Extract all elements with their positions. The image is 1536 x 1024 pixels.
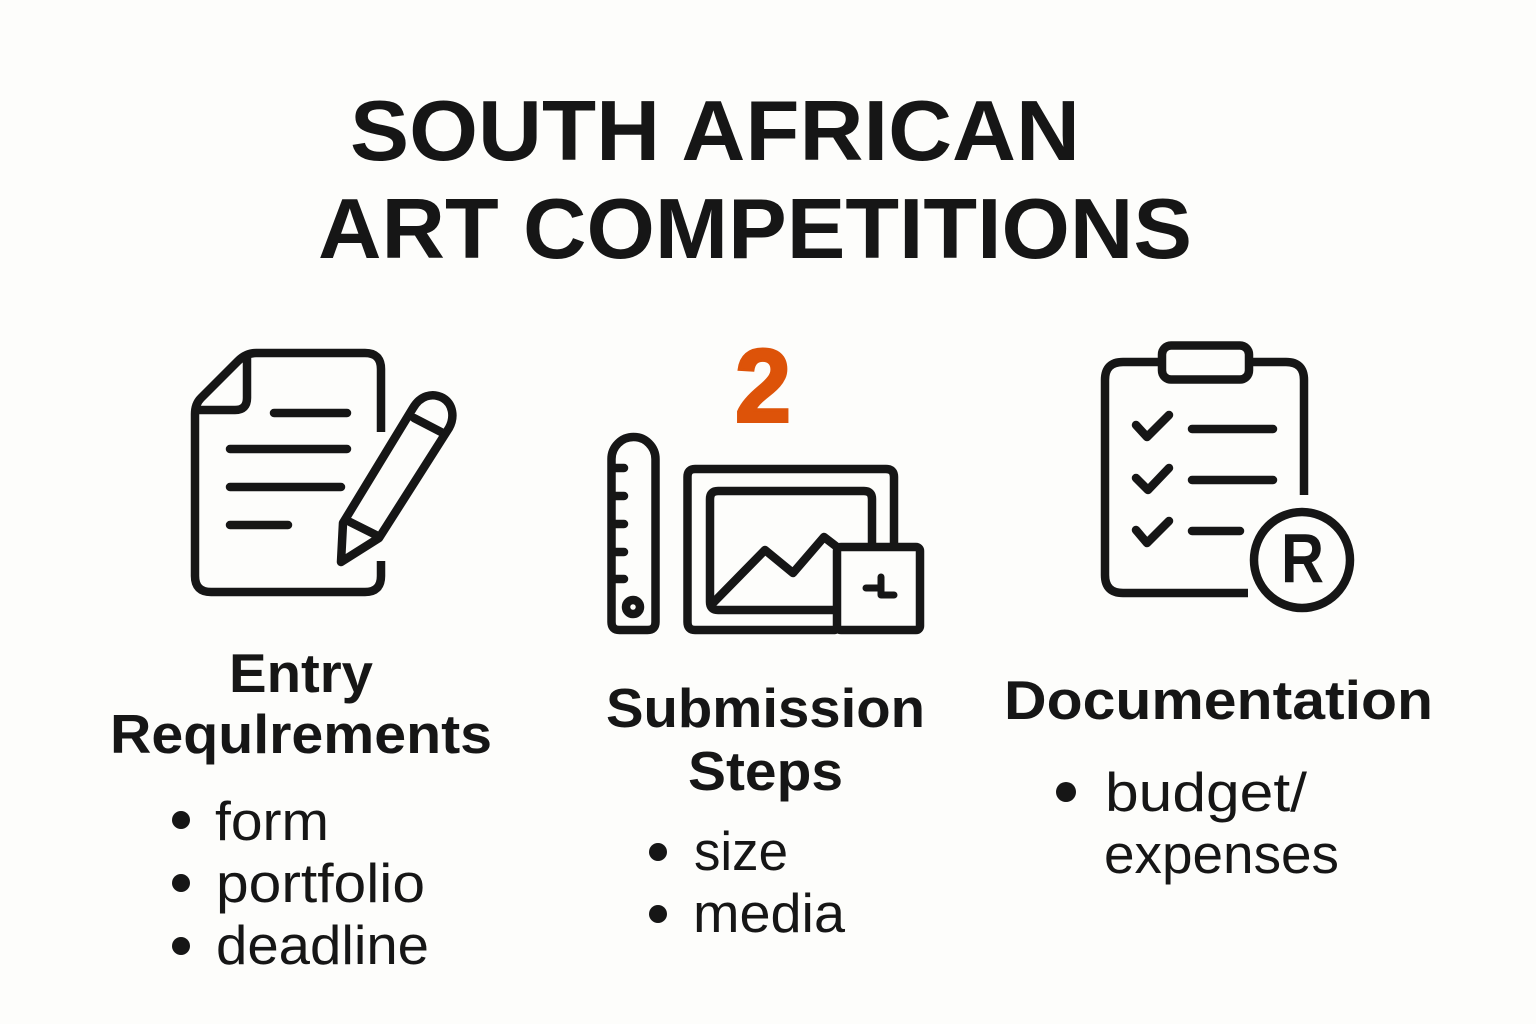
icon: registered mark: R: [1281, 519, 1324, 597]
icon: document with pencil: [195, 353, 452, 592]
title: ART COMPETITIONS: [318, 182, 1192, 277]
list: entry requirements: portfolio: [216, 852, 425, 914]
heading: submission steps: Steps: [688, 740, 843, 802]
heading: submission steps: Submission: [606, 677, 925, 739]
heading: submission steps: [606, 677, 925, 802]
title: [318, 84, 1192, 277]
step number 2: 2: [735, 328, 791, 444]
list: documentation: budget/: [1105, 761, 1308, 823]
heading: documentation: Documentation: [1004, 669, 1433, 731]
icon: clipboard checklist: [1105, 346, 1304, 593]
heading: entry requirements: [110, 642, 492, 765]
heading: entry requirements: Requlrements: [110, 703, 492, 765]
list: documentation: [1056, 761, 1339, 885]
list: entry requirements: form: [215, 790, 329, 852]
panel: submission steps: [606, 328, 925, 944]
list: submission steps: [649, 820, 845, 944]
list: entry requirements: deadline: [216, 914, 429, 976]
panel: documentation: [1004, 346, 1433, 885]
panel: entry requirements: [110, 353, 492, 976]
list: entry requirements: [172, 790, 429, 976]
icon: ruler: [612, 437, 656, 630]
list: documentation: expenses: [1104, 823, 1339, 885]
heading: entry requirements: Entry: [229, 642, 373, 704]
title: SOUTH AFRICAN: [350, 84, 1080, 179]
list: submission steps: size: [694, 820, 788, 882]
list: submission steps: media: [693, 882, 845, 944]
icon: framed artwork with small box: [688, 469, 920, 630]
icon: registered mark: [1254, 512, 1350, 608]
